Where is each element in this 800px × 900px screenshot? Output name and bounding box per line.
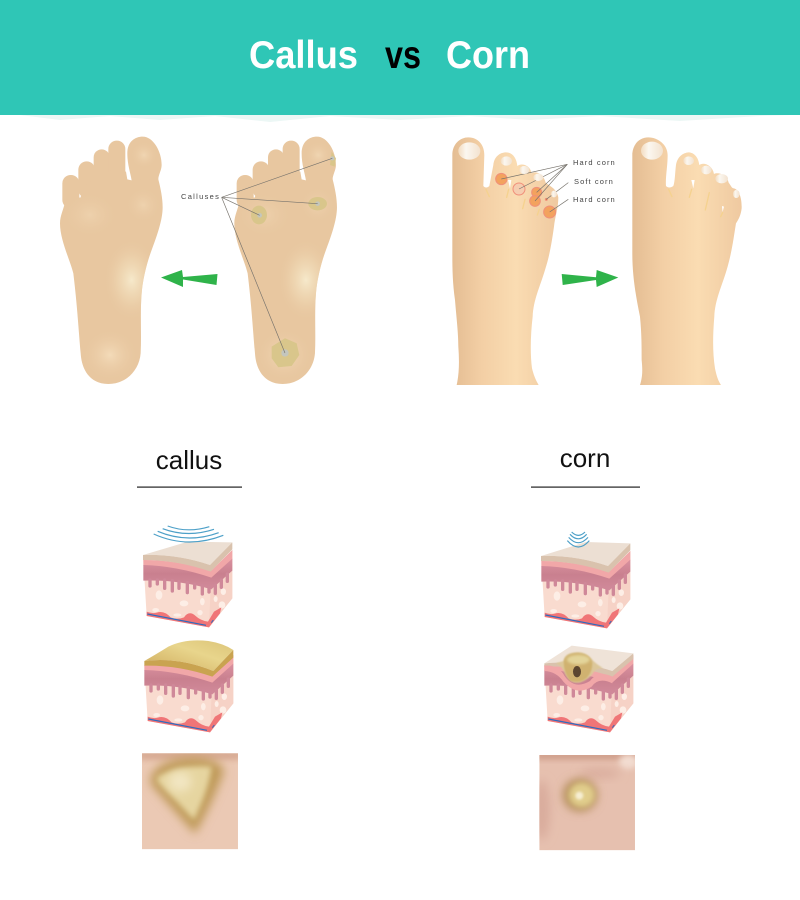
toenails <box>641 142 663 160</box>
labels: corn types: Hard corn <box>573 158 616 167</box>
toe creases <box>669 189 723 217</box>
labels: corn types <box>573 158 616 204</box>
pressure waves <box>154 526 223 542</box>
skin cube: corn core <box>544 646 633 732</box>
skin cube: normal, callus column <box>143 526 232 627</box>
foot sole: with calluses <box>222 137 337 384</box>
header band <box>0 0 800 122</box>
corn halo <box>556 652 603 683</box>
callus leader lines <box>222 158 332 353</box>
foot sole: healthy <box>60 137 163 384</box>
labels: corn types: Hard corn <box>573 195 616 204</box>
arrow: left <box>161 270 218 287</box>
photo: corn <box>539 755 635 850</box>
toe creases <box>486 189 539 215</box>
foot top: healthy <box>632 137 742 385</box>
title: vs <box>385 34 421 77</box>
toenails <box>458 142 480 160</box>
arrow: right <box>562 270 618 287</box>
corn <box>564 653 592 682</box>
skin cube: thick callus <box>144 640 233 732</box>
skin dip <box>544 666 612 691</box>
title: Corn <box>446 34 530 77</box>
photo: callus <box>139 750 241 849</box>
label: calluses: Calluses <box>181 192 220 201</box>
callus spots <box>251 152 336 367</box>
labels: corn types: Soft corn <box>574 177 614 186</box>
heading: callus <box>137 445 242 488</box>
corn leader lines <box>501 164 568 212</box>
corn spots <box>496 173 556 218</box>
heading: corn <box>531 443 640 488</box>
heading: callus: callus <box>156 445 222 475</box>
callus centres <box>257 156 334 357</box>
heading: corn: corn <box>560 443 610 473</box>
pressure waves <box>567 532 589 547</box>
corn core <box>573 666 581 677</box>
foot top: with corns <box>452 137 568 385</box>
title: Callus <box>249 34 358 77</box>
skin cube: normal, corn column <box>541 532 630 628</box>
title <box>249 34 530 77</box>
